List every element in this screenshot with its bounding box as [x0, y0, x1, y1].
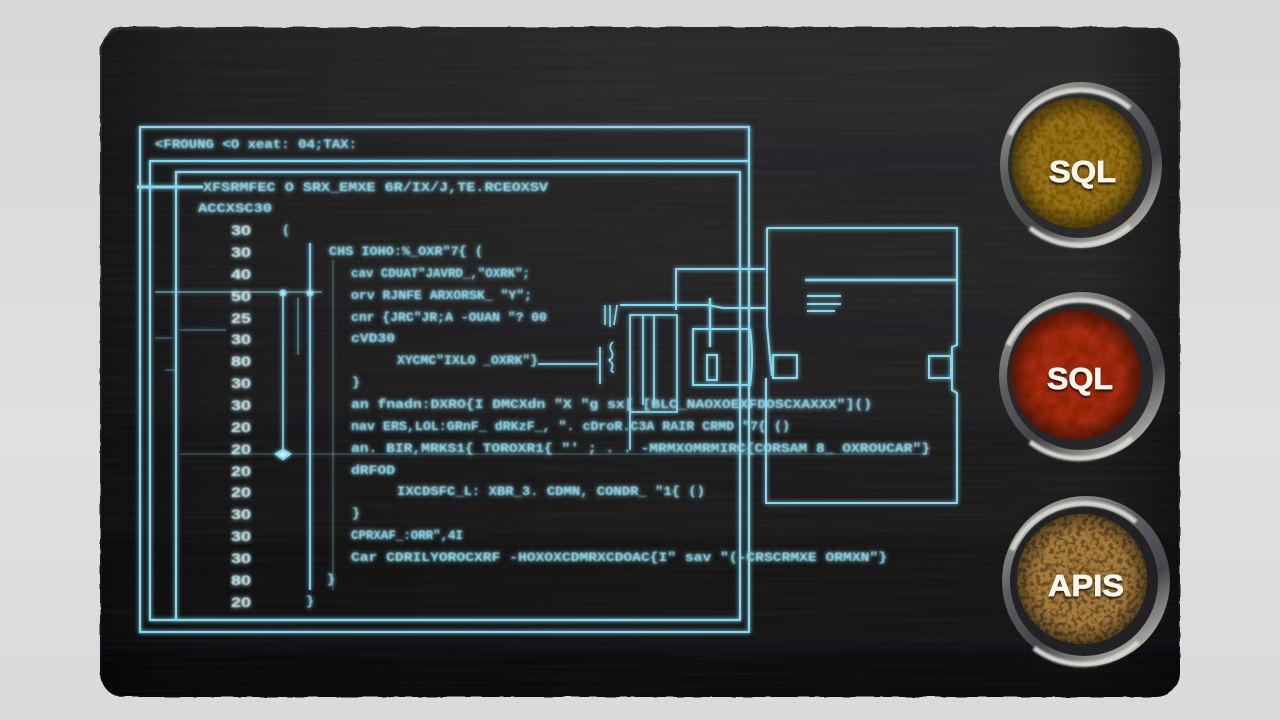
diagram: code window frames	[137, 127, 930, 632]
text block: code listing: }	[352, 375, 360, 390]
text block: code listing: cnr {JRC"JR;A -OUAN "? 00	[351, 310, 547, 325]
text block: code listing: }	[327, 572, 335, 587]
text block: code listing: Car CDRILYOROCXRF -HOXOXCDMRXCDOAC{I" sav "(-CRSCRMXE ORMXN"}	[351, 550, 887, 565]
diagram: line numbers: 20	[231, 463, 251, 479]
diagram: line numbers: 20	[231, 484, 251, 500]
icon: spice jar, brown APIs	[1002, 496, 1170, 666]
panel: slate board	[100, 27, 1180, 697]
diagram: line numbers: 30	[231, 397, 251, 413]
diagram: schema box and circuit connectors	[538, 228, 957, 503]
diagram: line numbers: 20	[231, 419, 251, 435]
text block: code listing: (	[282, 223, 290, 238]
diagram: line numbers: 40	[231, 266, 251, 282]
diagram: line numbers: 25	[231, 310, 251, 326]
diagram: line numbers: 30	[231, 244, 251, 260]
diagram: line numbers: 80	[231, 353, 251, 369]
text block: code listing: IXCDSFC_L: XBR_3. CDMN, CONDR_ "1{ ()	[397, 484, 705, 499]
icon: spice jar, red SQL	[999, 292, 1165, 460]
text block: code listing: cav CDUAT"JAVRD_,"OXRK";	[351, 266, 530, 281]
diagram: line numbers: 30	[231, 375, 251, 391]
text block: code listing: cVD30	[351, 331, 395, 346]
diagram: line numbers: 20	[231, 594, 251, 610]
diagram: line numbers: 80	[231, 572, 251, 588]
text block: code listing: dRFOD	[351, 463, 395, 478]
diagram: line numbers: 20	[231, 441, 251, 457]
label: SQL: SQL	[1049, 154, 1116, 189]
diagram: line numbers: 30	[231, 528, 251, 544]
text block: code listing: ACCXSC30	[198, 201, 272, 216]
diagram: line numbers: 30	[231, 506, 251, 522]
text block: code listing: }	[306, 594, 314, 609]
diagram: line numbers: 30	[231, 222, 251, 238]
diagram: line numbers: 30	[231, 331, 251, 347]
text block: code listing: an fnadn:DXRO{I DMCXdn "X "g sx[ [BLC_NAOXOEXFDOSCXAXXX"]()	[351, 397, 872, 412]
diagram: line numbers	[231, 222, 251, 610]
text block: code listing	[155, 137, 930, 609]
icon: spice jar, golden SQL	[1000, 82, 1162, 248]
text block: code listing: <FROUNG <O xeat: 04;TAX:	[155, 137, 357, 152]
diagram: line numbers: 50	[231, 288, 251, 304]
text block: code listing: XFSRMFEC O SRX_EMXE 6R/IX/J,TE.RCEOXSV	[203, 180, 548, 195]
label: SQL: SQL	[1047, 361, 1113, 396]
diagram: line numbers: 30	[231, 550, 251, 566]
text block: code listing: CPRXAF_:ORR",4I	[351, 528, 463, 543]
text block: code listing: XYCMC"IXLO _OXRK"}	[397, 353, 538, 368]
text block: code listing: }	[352, 506, 360, 521]
text block: code listing: orv RJNFE ARXORSK_ "Y";	[351, 288, 532, 303]
text block: code listing: nav ERS,LOL:GRnF_ dRKzF_, ". cDroR.C3A RAIR CRMD "7{ ()	[351, 419, 790, 434]
label: APIS: APIS	[1048, 568, 1124, 603]
text block: code listing: CHS IOHO:%_OXR"7{ (	[329, 244, 483, 259]
text block: code listing: an. BIR,MRKS1{ TOROXR1{ "' ; . . -MRMXOMRMIRC{CORSAM 8_ OXROUCAR"}	[351, 441, 930, 456]
